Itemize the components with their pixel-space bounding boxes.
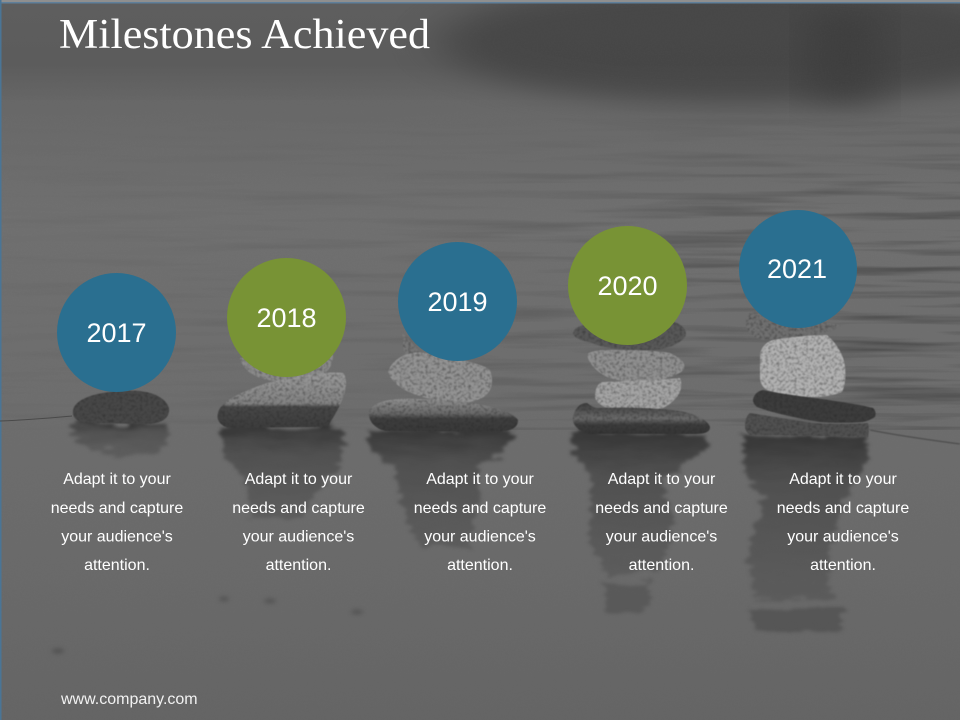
text block: 2021: attention. xyxy=(810,557,876,574)
text block: 2020: needs and capture xyxy=(595,500,728,517)
text block: 2017 xyxy=(51,471,183,574)
milestone circle: 2020: 2020 xyxy=(597,271,658,301)
text block: 2019: attention. xyxy=(447,557,513,574)
footer website: www.company.com xyxy=(60,691,198,708)
text block: 2018: attention. xyxy=(266,557,331,574)
text block: 2017: Adapt it to your xyxy=(63,471,171,488)
stone stack 5 xyxy=(745,312,876,437)
text block: 2020: attention. xyxy=(629,557,694,574)
milestone circle: 2021 xyxy=(739,210,857,328)
text block: 2018: Adapt it to your xyxy=(245,471,353,488)
text block: 2021: Adapt it to your xyxy=(789,471,897,488)
text block: 2017: your audience's xyxy=(61,528,173,546)
milestone circle: 2019 xyxy=(398,242,517,361)
water reflections of the stone stacks xyxy=(52,422,868,654)
text block: 2019: your audience's xyxy=(424,528,536,546)
stone stack 4 xyxy=(573,322,710,434)
title: Milestones Achieved xyxy=(59,12,430,58)
text block: 2021 xyxy=(777,471,909,574)
text block: 2020: your audience's xyxy=(606,528,717,546)
milestone circle: 2017: 2017 xyxy=(86,318,147,348)
text block: 2019: needs and capture xyxy=(414,500,546,517)
text block: 2018 xyxy=(232,471,365,574)
text block: 2020 xyxy=(595,471,728,574)
text block: 2017: attention. xyxy=(84,557,150,574)
milestone circle: 2017 xyxy=(57,273,176,392)
stone stack 3 xyxy=(369,332,518,432)
milestone circle: 2018: 2018 xyxy=(256,303,317,333)
milestone circle: 2018 xyxy=(227,258,346,377)
milestone circle: 2019: 2019 xyxy=(427,287,488,317)
text block: 2018: your audience's xyxy=(243,528,354,546)
milestone circle: 2021: 2021 xyxy=(767,254,827,284)
text block: 2017: needs and capture xyxy=(51,500,183,517)
stone stack 2 xyxy=(217,355,346,428)
text block: 2018: needs and capture xyxy=(232,500,365,517)
text block: 2019 xyxy=(414,471,546,574)
text block: 2019: Adapt it to your xyxy=(426,471,534,488)
stone stack 1 xyxy=(73,391,169,424)
text block: 2021: needs and capture xyxy=(777,500,909,517)
text block: 2021: your audience's xyxy=(787,528,899,546)
milestone circle: 2020 xyxy=(568,226,687,345)
text block: 2020: Adapt it to your xyxy=(608,471,716,488)
